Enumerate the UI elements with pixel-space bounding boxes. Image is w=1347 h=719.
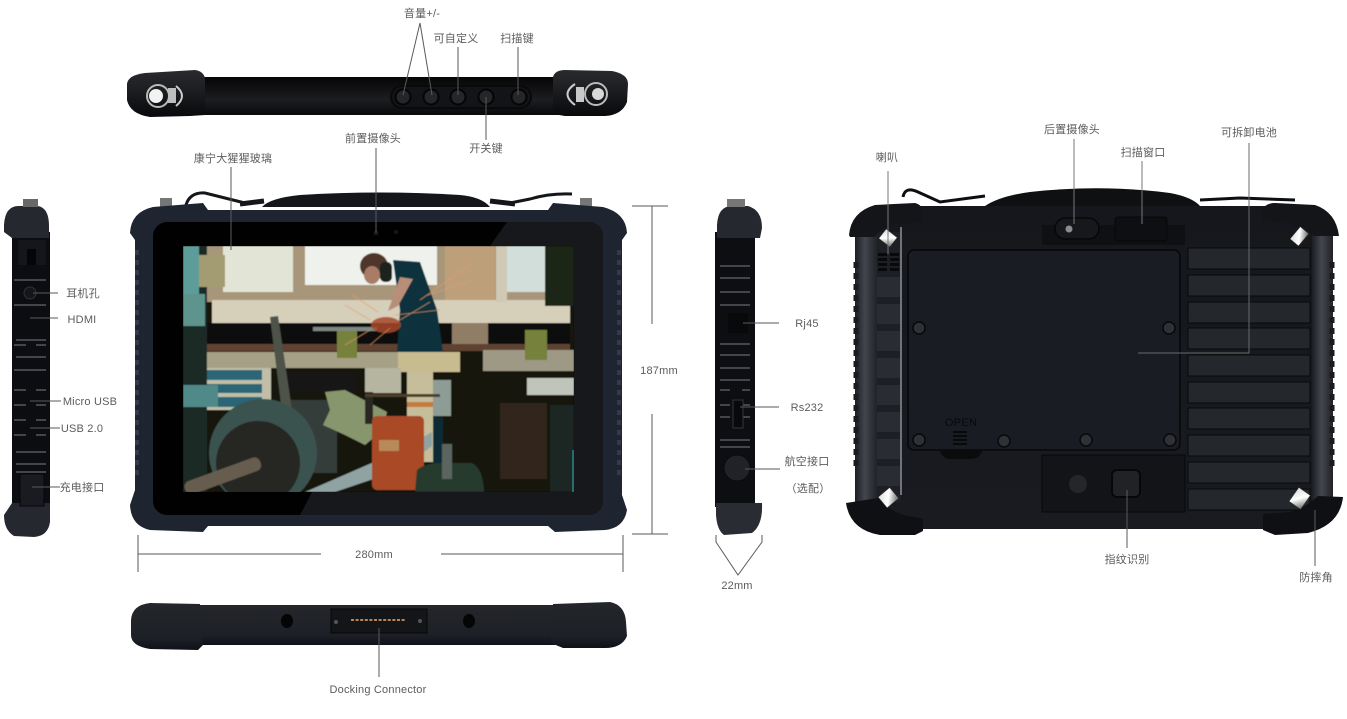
scan button — [512, 90, 526, 104]
left machine — [183, 246, 207, 492]
glass glare — [300, 222, 603, 515]
right edge grip — [1330, 262, 1334, 470]
callout: customisable key: 可自定义 — [434, 31, 478, 45]
callout: fingerprint: 指纹识别 — [1105, 552, 1149, 566]
power button — [478, 90, 494, 104]
side grip left — [135, 250, 139, 480]
callout: hdmi — [30, 314, 96, 326]
panel: back view of tablet — [846, 188, 1343, 535]
camera dots — [374, 230, 398, 236]
callout: removable battery: 可拆卸电池 — [1221, 125, 1277, 139]
right cap — [551, 602, 627, 648]
top screw — [727, 199, 745, 207]
top camera bay — [1042, 225, 1185, 245]
left end cap — [127, 70, 205, 117]
wall — [206, 246, 546, 303]
left strap ring — [147, 85, 182, 107]
green bracket — [323, 390, 387, 445]
callout: rs232: Rs232 — [791, 402, 823, 414]
button strip — [391, 86, 531, 108]
right end cap — [553, 70, 628, 116]
callout: volume — [403, 6, 440, 95]
aviation connector — [724, 455, 750, 481]
carry handle — [903, 188, 1295, 206]
port block top — [18, 240, 46, 265]
left edge grip — [854, 262, 858, 470]
callout: aviation connector: （选配） — [786, 482, 830, 495]
pale column — [407, 372, 433, 462]
back body — [855, 206, 1333, 529]
battery cover — [908, 250, 1180, 450]
docking connector plate — [331, 609, 427, 633]
bottom cap — [716, 503, 762, 535]
charge port door — [20, 474, 44, 506]
side grip right — [617, 250, 621, 480]
callout: hdmi: HDMI — [68, 314, 96, 326]
sparks — [345, 265, 475, 345]
callout: gorilla glass: 康宁大猩猩玻璃 — [194, 151, 272, 165]
custom button — [450, 90, 466, 104]
callout: removable battery — [1138, 125, 1277, 353]
grip ribs — [14, 280, 46, 472]
windows — [223, 246, 293, 292]
battery latch — [940, 451, 982, 459]
panel: left side view — [4, 199, 50, 537]
callout: scan window — [1121, 145, 1165, 224]
callout: rear camera: 后置摄像头 — [1044, 122, 1100, 136]
screen bezel — [153, 222, 603, 515]
vises — [337, 330, 357, 358]
open latch stripes — [953, 432, 967, 444]
headphone port — [24, 287, 36, 299]
foreground vise — [415, 463, 484, 492]
panel: front view of tablet — [130, 192, 627, 532]
top screws — [23, 199, 38, 207]
pillar in sill — [496, 246, 507, 302]
callout: charging port — [32, 480, 104, 494]
callout: rs232 — [740, 402, 823, 414]
volume minus button — [396, 90, 410, 104]
left ribs — [877, 277, 900, 486]
callout: drop protection corner — [1299, 510, 1333, 584]
drawers — [205, 368, 271, 410]
callout: rear camera — [1044, 122, 1100, 224]
left grey strip — [855, 232, 877, 502]
battery screws — [913, 322, 1176, 447]
handle bar body — [195, 77, 560, 115]
callout: aviation connector — [745, 454, 830, 495]
side body — [715, 232, 755, 507]
dimension: thickness 22mm: 22mm — [721, 580, 753, 592]
dark band — [205, 323, 570, 344]
top right bumper — [1262, 203, 1339, 236]
volume plus button — [424, 90, 438, 104]
fingerprint module — [1042, 455, 1185, 512]
callout: rj45: Rj45 — [795, 318, 819, 330]
callout: usb 2.0 — [30, 423, 103, 435]
panel: right side view — [715, 199, 762, 535]
left screw hole — [281, 614, 293, 628]
rj45 port — [728, 313, 748, 333]
person — [360, 253, 443, 467]
callout: customisable key — [434, 31, 478, 95]
callout: micro usb — [30, 396, 117, 408]
bottom cap — [4, 503, 50, 537]
right ribs — [1188, 248, 1310, 510]
cream sill band — [212, 300, 570, 323]
callout: headphone jack: 耳机孔 — [66, 286, 100, 300]
rugged bumper — [130, 203, 627, 532]
dimension: thickness 22mm — [716, 535, 762, 592]
right strap ring — [568, 83, 607, 105]
screen photo: workshop — [183, 246, 574, 507]
open label: OPEN — [945, 417, 977, 429]
right grey strip — [1312, 232, 1333, 502]
callout: speaker: 喇叭 — [876, 150, 898, 164]
callout: volume: 音量+/- — [404, 6, 440, 20]
callout: charging port: 充电接口 — [60, 480, 104, 494]
callout: micro usb: Micro USB — [63, 396, 117, 408]
callout: scan key: 扫描键 — [500, 31, 534, 45]
left rib column base — [877, 232, 901, 502]
fingerprint logo — [1069, 475, 1087, 493]
callout: gorilla glass — [194, 151, 272, 250]
teal edge artifact — [572, 450, 574, 492]
speaker grille — [878, 253, 899, 271]
scan window — [1115, 217, 1167, 241]
callout: headphone jack — [33, 286, 100, 300]
fingerprint sensor — [1112, 470, 1140, 497]
callout: rj45 — [743, 318, 819, 330]
steel bar — [305, 432, 432, 492]
arbor — [270, 316, 292, 412]
camera pill — [1055, 218, 1099, 239]
orange block — [372, 416, 424, 490]
rs232 port — [733, 400, 743, 428]
white edge highlight — [900, 227, 902, 495]
panel: bottom edge view — [131, 602, 627, 650]
callout: usb 2.0: USB 2.0 — [61, 423, 103, 435]
dimension: height 187mm — [632, 206, 678, 534]
callout: fingerprint — [1105, 490, 1149, 566]
bottom right bumper — [1263, 496, 1343, 535]
top cap — [4, 206, 49, 238]
big wheel — [184, 398, 317, 492]
camera lens — [1066, 226, 1072, 232]
dimension: width 280mm: 280mm — [355, 549, 393, 561]
bottom body — [200, 605, 560, 645]
callout: docking connector — [330, 628, 427, 696]
grip ribs — [720, 266, 750, 447]
callout: aviation connector: 航空接口 — [785, 454, 829, 468]
callout: power key: 开关键 — [469, 141, 503, 155]
top cap — [717, 206, 762, 238]
callout: docking connector: Docking Connector — [330, 684, 427, 696]
bottom left bumper — [846, 498, 923, 535]
right screw hole — [463, 614, 475, 628]
strap loops — [878, 227, 1310, 509]
carry handle — [160, 192, 592, 207]
callout: front camera — [345, 131, 401, 233]
dimension: height 187mm: 187mm — [640, 365, 678, 377]
left cap — [131, 603, 203, 650]
callout: front camera: 前置摄像头 — [345, 131, 401, 145]
side body — [12, 232, 50, 507]
callout: scan key — [500, 31, 534, 95]
top left bumper — [849, 203, 923, 237]
callout: speaker — [876, 150, 898, 254]
callout: scan window: 扫描窗口 — [1121, 145, 1165, 159]
panel: top edge view with buttons — [127, 70, 628, 117]
bench — [200, 352, 400, 368]
dimension: width 280mm — [138, 535, 623, 572]
right machine — [545, 246, 574, 306]
callout: power key — [469, 97, 503, 155]
callout: drop protection corner: 防摔角 — [1299, 570, 1333, 584]
